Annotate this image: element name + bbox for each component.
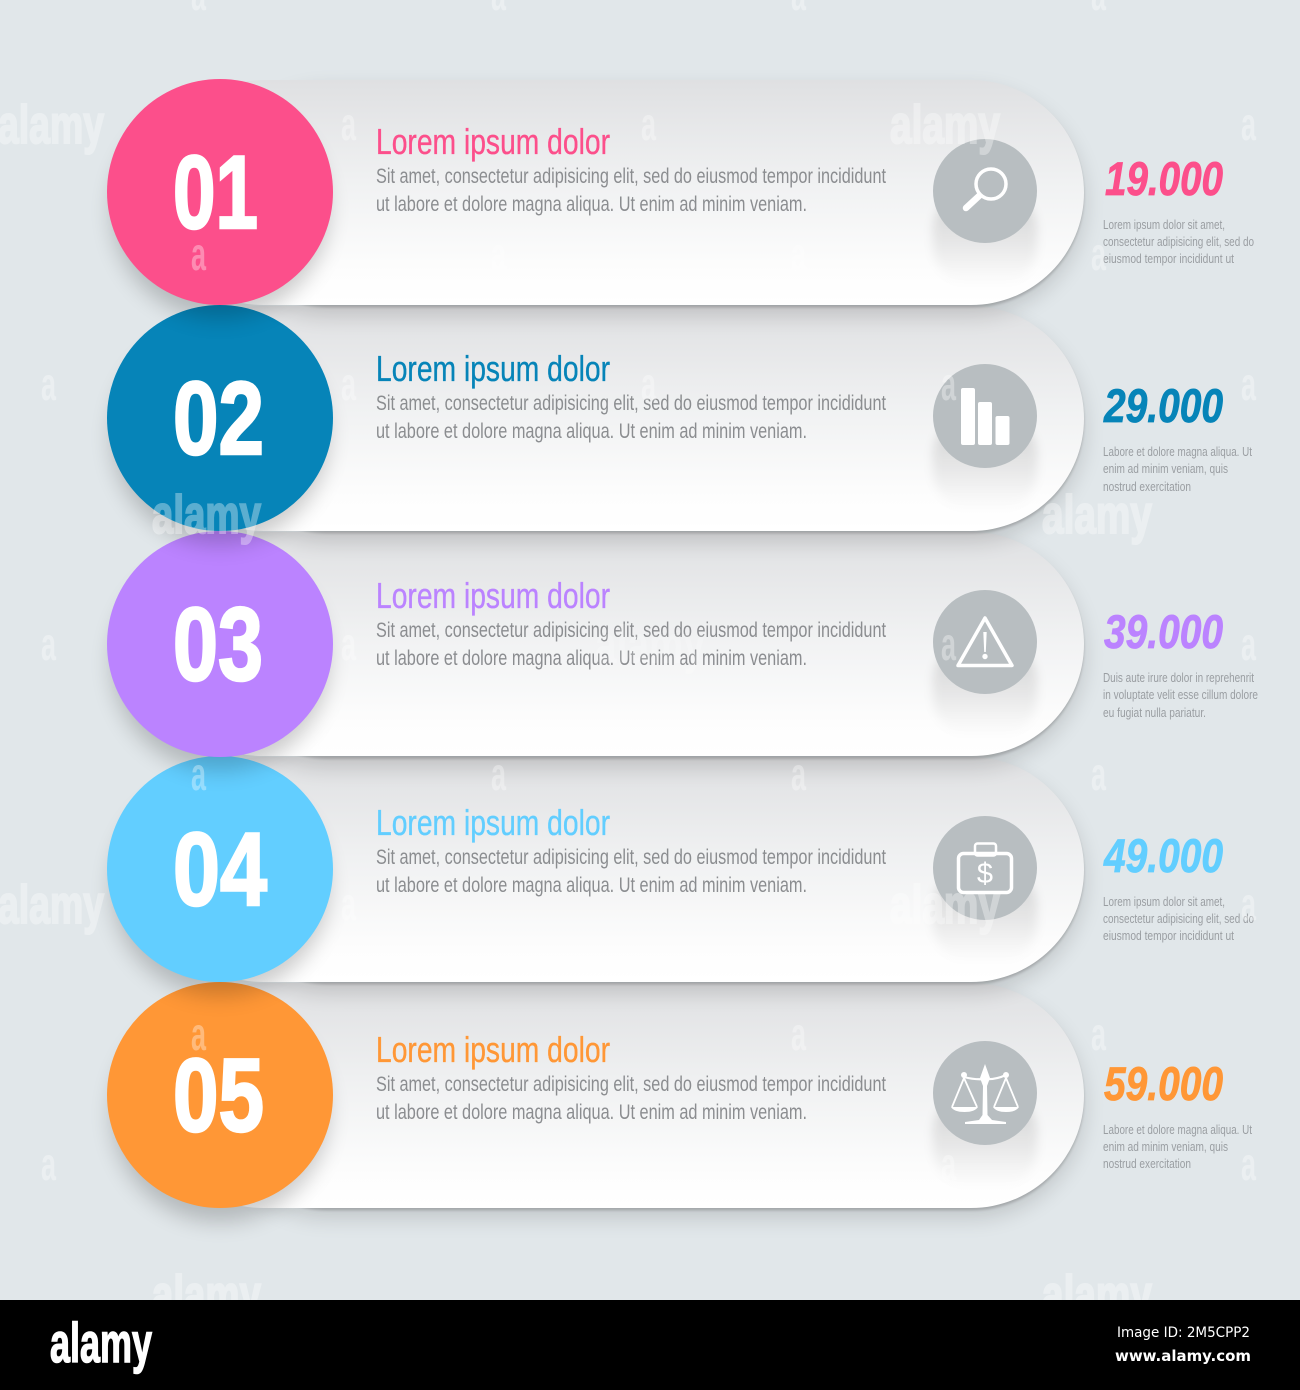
watermarks: a (341, 98, 356, 150)
badge 1 (107, 79, 333, 319)
badge 5 (107, 982, 333, 1222)
watermarks: a (1091, 228, 1106, 280)
stat 5 (1103, 1057, 1252, 1171)
icon: money case: $ (977, 858, 993, 890)
badge 4: 04 (173, 812, 267, 928)
text block 3 (376, 619, 886, 670)
row 3 (107, 531, 1084, 771)
watermarks: alamy (890, 95, 1000, 155)
heading 2: Lorem ipsum dolor (376, 348, 610, 389)
panel 4 (150, 757, 1084, 982)
text block 4: ut labore et dolore magna aliqua. Ut enim ad minim veniam. (376, 874, 807, 897)
stat 4: consectetur adipisicing elit, sed do (1103, 911, 1254, 926)
watermarks: a (41, 358, 56, 410)
icon: bar chart (933, 364, 1037, 511)
icon: warning (933, 590, 1037, 737)
text block 1 (376, 165, 886, 216)
pill shadow 5 (215, 986, 1084, 1218)
stat 5: 59.000 (1104, 1057, 1223, 1110)
watermarks: a (1241, 878, 1256, 930)
row 5 (107, 982, 1084, 1222)
stat 4: Lorem ipsum dolor sit amet, (1103, 894, 1225, 909)
panel 3 (150, 532, 1084, 756)
watermarks: a (1241, 98, 1256, 150)
stat 5: enim ad minim veniam, quis (1103, 1139, 1228, 1154)
stat 1: Lorem ipsum dolor sit amet, (1103, 217, 1225, 232)
pill shadow 3 (215, 534, 1084, 767)
pill shadow 4 (215, 760, 1084, 992)
stat 5: nostrud exercitation (1103, 1156, 1191, 1171)
watermarks: a (941, 618, 956, 670)
watermarks: a (191, 748, 206, 800)
stat 2 (1103, 379, 1252, 494)
text block 5: ut labore et dolore magna aliqua. Ut enim ad minim veniam. (376, 1101, 807, 1124)
stat 3: Duis aute irure dolor in reprehenrit (1103, 670, 1254, 685)
watermarks: a (791, 1008, 806, 1060)
stat 4: 49.000 (1103, 829, 1223, 882)
text block 4: Sit amet, consectetur adipisicing elit, sed do eiusmod tempor incididunt (376, 846, 886, 869)
text block 5 (376, 1073, 886, 1124)
watermarks: a (341, 358, 356, 410)
badge 2 (107, 305, 333, 545)
stat 2: 29.000 (1103, 379, 1223, 432)
watermarks: a (1241, 1138, 1256, 1190)
text block 3: Sit amet, consectetur adipisicing elit, sed do eiusmod tempor incididunt (376, 619, 886, 642)
badge 1: 01 (173, 135, 258, 251)
stat 4: eiusmod tempor incididunt ut (1103, 928, 1234, 943)
stat 4 (1103, 829, 1254, 943)
icon: scales (933, 1041, 1037, 1188)
panel 1 (150, 80, 1084, 305)
heading 3: Lorem ipsum dolor (376, 575, 610, 616)
watermarks: a (1241, 618, 1256, 670)
watermarks: a (1091, 1008, 1106, 1060)
row 4 (107, 756, 1084, 996)
watermarks: a (941, 1138, 956, 1190)
watermarks: a (791, 748, 806, 800)
website: www.alamy.com (1115, 1347, 1251, 1365)
icon: magnifier (933, 139, 1037, 286)
stat 1: 19.000 (1105, 152, 1223, 205)
watermarks: a (941, 358, 956, 410)
heading 5: Lorem ipsum dolor (376, 1029, 610, 1070)
badge 2: 02 (173, 361, 264, 477)
text block 1: ut labore et dolore magna aliqua. Ut enim ad minim veniam. (376, 193, 807, 216)
stat 1 (1103, 152, 1254, 266)
watermarks: alamy (0, 875, 104, 935)
watermarks: a (791, 228, 806, 280)
watermarks: a (41, 618, 56, 670)
stat 5: Labore et dolore magna aliqua. Ut (1103, 1122, 1252, 1137)
text block 2: ut labore et dolore magna aliqua. Ut enim ad minim veniam. (376, 420, 807, 443)
stat 3: 39.000 (1104, 605, 1223, 658)
footer bar (0, 1300, 1300, 1390)
watermarks: a (491, 748, 506, 800)
stat 2: enim ad minim veniam, quis (1103, 461, 1228, 476)
stat 1: eiusmod tempor incididunt ut (1103, 251, 1234, 266)
watermarks: alamy (890, 875, 1000, 935)
row 2 (107, 305, 1084, 545)
stat 2: nostrud exercitation (1103, 479, 1191, 494)
badge 5: 05 (173, 1038, 264, 1154)
badge 4 (107, 756, 333, 996)
watermarks: a (341, 878, 356, 930)
image id: Image ID: 2M5CPP2 (1117, 1325, 1250, 1341)
watermarks: a (191, 228, 206, 280)
row 1 (107, 79, 1084, 319)
watermarks: alamy (152, 485, 261, 545)
heading 4: Lorem ipsum dolor (376, 802, 610, 843)
stat 3 (1103, 605, 1258, 720)
stat 2: Labore et dolore magna aliqua. Ut (1103, 444, 1252, 459)
watermarks: alamy (1042, 485, 1152, 545)
watermarks: a (641, 358, 656, 410)
panel 2 (150, 306, 1084, 531)
watermarks: a (341, 618, 356, 670)
text block 2 (376, 392, 886, 443)
pill shadow 2 (215, 308, 1084, 541)
watermarks: a (191, 1008, 206, 1060)
stat 3: in voluptate velit esse cillum dolore (1103, 687, 1258, 702)
watermarks: alamy (0, 95, 104, 155)
pill shadow 1 (215, 82, 1084, 315)
heading 1: Lorem ipsum dolor (376, 121, 610, 162)
watermarks: alamy (152, 1265, 261, 1325)
watermarks: a (41, 1138, 56, 1190)
badge 3 (107, 531, 333, 771)
text block 3: ut labore et dolore magna aliqua. Ut enim ad minim veniam. (376, 647, 807, 670)
logo: alamy (50, 1311, 152, 1374)
panel 5 (150, 983, 1084, 1208)
stat 3: eu fugiat nulla pariatur. (1103, 705, 1206, 720)
watermarks: a (641, 98, 656, 150)
text block 1: Sit amet, consectetur adipisicing elit, sed do eiusmod tempor incididunt (376, 165, 886, 188)
stat 1: consectetur adipisicing elit, sed do (1103, 234, 1254, 249)
text block 2: Sit amet, consectetur adipisicing elit, sed do eiusmod tempor incididunt (376, 392, 886, 415)
badge 3: 03 (173, 587, 263, 703)
watermarks: a (1091, 748, 1106, 800)
text block 5: Sit amet, consectetur adipisicing elit, sed do eiusmod tempor incididunt (376, 1073, 886, 1096)
text block 4 (376, 846, 886, 897)
watermarks: alamy (1042, 1265, 1152, 1325)
watermarks: alamy (595, 615, 705, 675)
watermarks: a (491, 228, 506, 280)
watermarks: a (1241, 358, 1256, 410)
icon: money case (933, 816, 1037, 963)
